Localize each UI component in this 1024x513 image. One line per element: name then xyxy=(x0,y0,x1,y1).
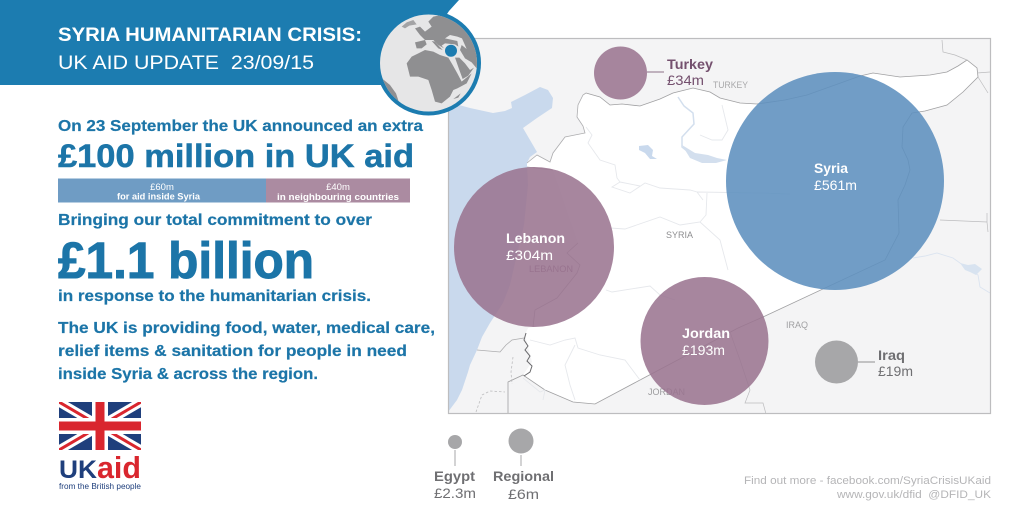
split bar: 60m and 40m: £60m xyxy=(150,182,174,193)
headline: 1.1 billion: £1.1 billion xyxy=(58,232,314,289)
Africa xyxy=(407,50,472,103)
bubble: Syria: Syria xyxy=(814,161,848,176)
South America xyxy=(382,79,398,101)
split bar: 60m and 40m: in neighbouring countries xyxy=(277,192,399,203)
icon: union flag xyxy=(59,402,141,450)
dark zigzag border xyxy=(524,333,532,376)
commitment text: Bringing our total commitment to over xyxy=(58,212,372,229)
panel: map of Syria and neighbours xyxy=(448,38,991,414)
map label: Jordan: JORDAN xyxy=(648,387,685,397)
footer links: Find out more - facebook.com/SyriaCrisisUKaid xyxy=(744,475,991,487)
Arabia and Asia xyxy=(455,58,474,79)
rivers and lakes xyxy=(678,97,694,155)
bubble: Iraq xyxy=(815,340,913,384)
bubble: Turkey xyxy=(594,46,713,100)
bubble: Jordan: £193m xyxy=(682,342,725,358)
footer links: www.gov.uk/dfid @DFID_UK xyxy=(836,489,992,501)
map label: Iraq: IRAQ xyxy=(786,320,808,330)
headline: 100 million: £100 million in UK aid xyxy=(58,138,414,174)
Iberia and Italy xyxy=(415,40,427,48)
bubble: Jordan xyxy=(640,277,768,405)
bubble: Regional xyxy=(493,428,554,502)
bubble: Iraq: £19m xyxy=(878,363,913,379)
internal borders xyxy=(523,105,728,400)
bubble: Regional: Regional xyxy=(493,468,554,484)
bubble: Lebanon: Lebanon xyxy=(506,230,565,246)
Madagascar xyxy=(453,93,461,99)
description text xyxy=(58,320,435,383)
map label: Lebanon: LEBANON xyxy=(529,264,573,274)
bubble: Egypt: Egypt xyxy=(434,468,475,484)
description text: relief items & sanitation for people in need xyxy=(58,343,407,360)
bubble: Lebanon: £304m xyxy=(506,247,553,263)
description text: The UK is providing food, water, medical care, xyxy=(58,320,435,337)
bubble: Syria xyxy=(726,72,944,290)
bubble: Jordan: Jordan xyxy=(682,325,730,341)
logo: UK aid: UK xyxy=(59,456,97,484)
logo: UK aid: from the British people xyxy=(59,481,141,491)
bubble: Syria: £561m xyxy=(814,177,857,193)
map label: Syria: SYRIA xyxy=(666,230,693,240)
bubble: Turkey: £34m xyxy=(667,72,704,88)
Scandinavia and Greenland xyxy=(402,20,417,28)
external borders xyxy=(508,60,978,414)
map label: Turkey: TURKEY xyxy=(713,80,748,90)
title banner: SYRIA HUMANITARIAN CRISIS: xyxy=(58,25,362,46)
sea xyxy=(448,87,553,412)
bubble: Regional: £6m xyxy=(508,486,539,502)
split bar: 60m and 40m: for aid inside Syria xyxy=(117,192,201,202)
intro text: On 23 September the UK announced an extra xyxy=(58,118,423,135)
bubble: Turkey: Turkey xyxy=(667,56,713,72)
bubble: Egypt: £2.3m xyxy=(434,485,476,501)
logo: UK aid: aid xyxy=(97,450,141,485)
bubble: Iraq: Iraq xyxy=(878,347,905,363)
split bar: 60m and 40m: £40m xyxy=(326,182,350,193)
response text: in response to the humanitarian crisis. xyxy=(58,288,371,305)
description text: inside Syria & across the region. xyxy=(58,366,318,383)
logo: UK aid xyxy=(59,402,141,491)
footer links xyxy=(744,475,992,501)
icon: globe xyxy=(376,10,485,116)
Syria land xyxy=(523,60,978,404)
split bar: 60m and 40m xyxy=(58,178,410,203)
title banner xyxy=(0,0,459,85)
bubble: Lebanon xyxy=(454,167,614,327)
bubble: Egypt xyxy=(434,435,476,501)
title banner: UK AID UPDATE 23/09/15 xyxy=(58,53,314,74)
